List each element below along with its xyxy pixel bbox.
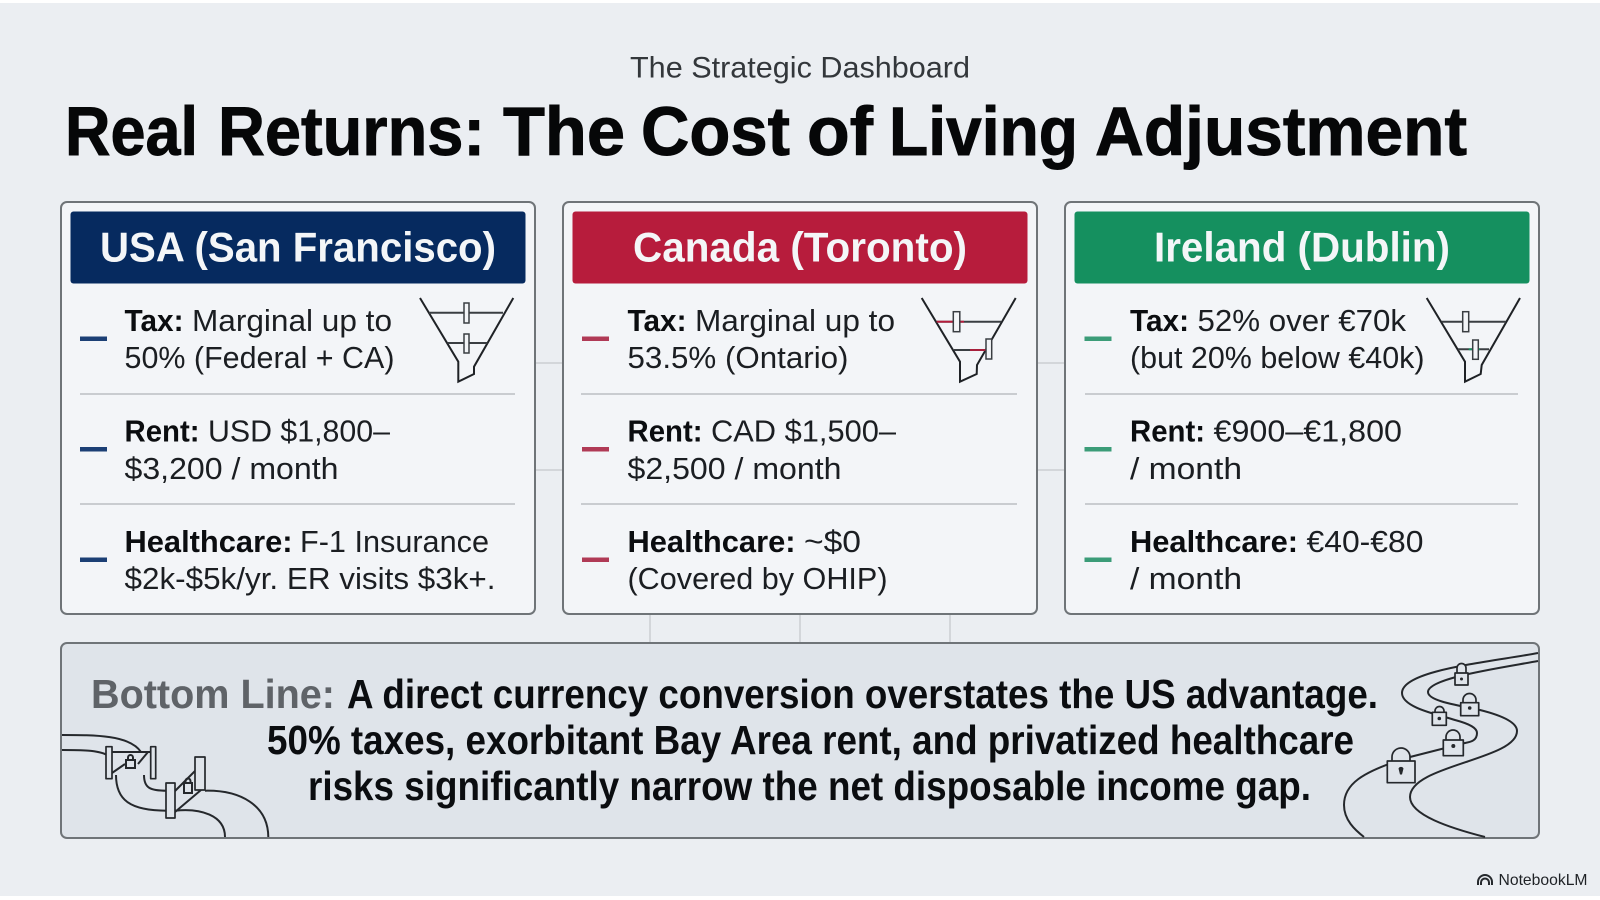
padlock 5 [1387,748,1415,783]
icon: tax funnel [420,298,513,382]
title: Returns: [218,93,485,170]
icon: winding road with padlocks [1344,653,1538,837]
row: rent [1084,414,1402,486]
row: tax: Marginal up to [695,303,895,338]
row: tax: (but 20% below €40k) [1130,340,1424,375]
padlock 4 [1443,730,1463,756]
row: healthcare: (Covered by OHIP) [628,561,888,596]
bottom line text: Bottom Line: [91,671,335,717]
row: healthcare [582,524,888,596]
row: tax: 53.5% (Ontario) [628,340,848,375]
title: of [807,93,874,170]
row: tax: Tax: [628,303,686,338]
row: tax [80,303,394,375]
row: rent: Rent: [124,414,200,448]
row: rent: $3,200 / month [124,451,338,486]
title: Real [65,93,198,170]
header: Ireland: Ireland (Dublin) [1154,224,1450,270]
row: rent: Rent: [1130,414,1205,448]
row: rent: / month [1130,451,1242,486]
row: rent: $2,500 / month [628,451,842,486]
row: rent: €900–€1,800 [1214,414,1402,448]
NotebookLM badge: NotebookLM [1498,872,1588,889]
row: rent: USD $1,800– [208,414,391,448]
row: healthcare: / month [1130,561,1242,596]
row: healthcare: ~$0 [804,524,861,559]
row: healthcare: Healthcare: [124,524,292,559]
row: healthcare [1084,524,1424,596]
header: Canada [572,212,1028,284]
icon: pipeline with locked valves [62,735,268,837]
panel: USA (San Francisco) [61,202,535,614]
title: Cost [641,93,790,170]
subtitle: The Strategic Dashboard [630,52,970,84]
row: rent [80,414,391,486]
padlock 1 [1455,664,1468,685]
header: USA: USA (San Francisco) [100,224,496,270]
row: tax: 52% over €70k [1198,303,1406,338]
panel: bottom line [61,643,1539,838]
header: USA [70,212,526,284]
row: healthcare: Healthcare: [628,524,796,559]
row: rent: CAD $1,500– [711,414,897,448]
row: rent: Rent: [628,414,702,448]
row: rent [582,414,897,486]
padlock 2 [1461,694,1479,716]
title: Living [889,93,1078,170]
bottom line text: 50% taxes, exorbitant Bay Area rent, and privatized healthcare [267,717,1354,763]
title: The [503,93,625,170]
header: Canada: Canada (Toronto) [633,224,967,270]
row: tax [582,303,895,375]
icon: tax funnel [922,298,1016,382]
row: healthcare: €40-€80 [1306,524,1424,559]
row: tax: 50% (Federal + CA) [124,340,394,375]
icon: tax funnel [1427,298,1520,382]
row: tax: Tax: [124,303,184,338]
panel: Canada (Toronto) [563,202,1037,614]
bottom line text [91,671,1378,809]
title [65,93,1467,170]
row: tax: Marginal up to [192,303,392,338]
row: healthcare: $2k-$5k/yr. ER visits $3k+. [124,561,495,596]
bottom line text: A direct currency conversion overstates the US advantage. [347,671,1378,717]
row: tax [1084,303,1424,375]
row: healthcare: Healthcare: [1130,524,1298,559]
panel: Ireland (Dublin) [1065,202,1539,614]
row: healthcare [80,524,495,596]
title: Adjustment [1095,93,1467,170]
header: Ireland [1074,212,1530,284]
bottom line text: risks significantly narrow the net disposable income gap. [308,763,1311,809]
padlock 3 [1432,706,1446,725]
row: healthcare: F-1 Insurance [300,524,489,559]
row: tax: Tax: [1130,303,1189,338]
